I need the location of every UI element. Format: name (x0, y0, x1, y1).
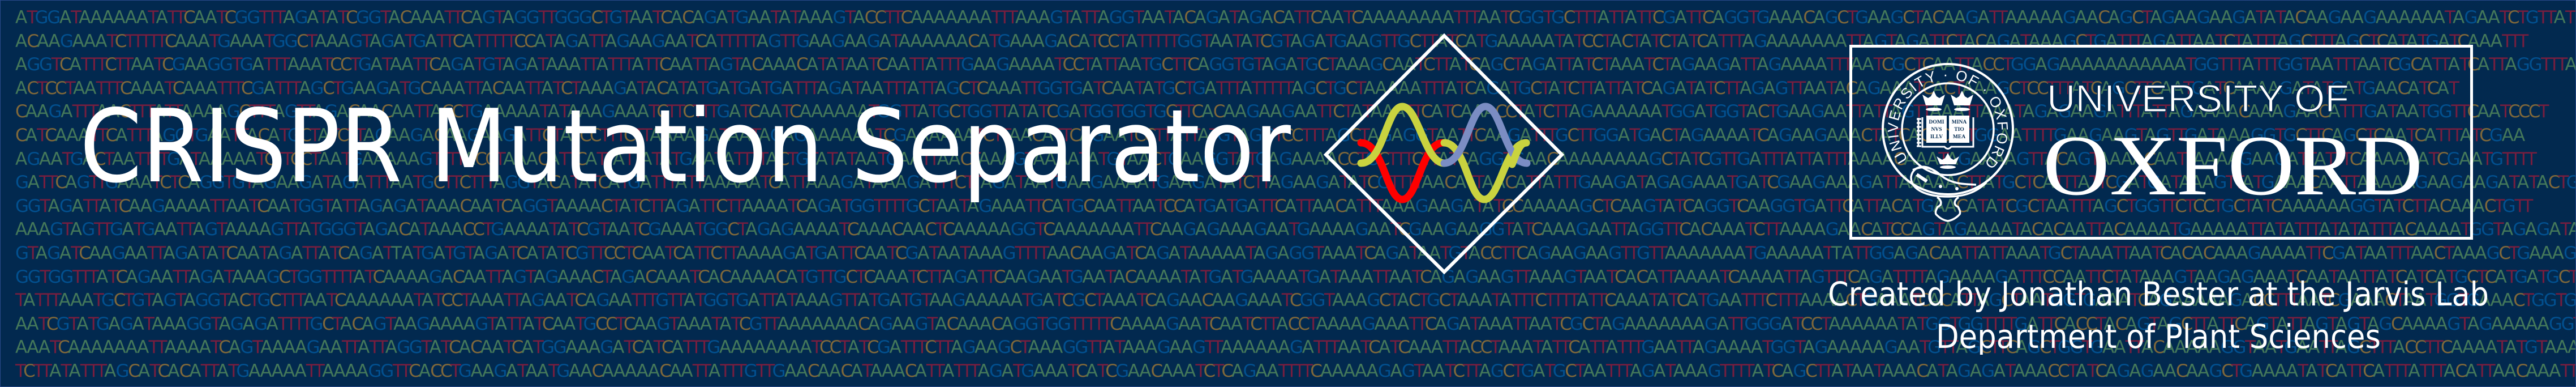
background: DNA sequence letters: ACTCCTAATTTCAAATCAAATTTCGATTTAGCTGAAGATGCAAATTACAATTATCTAAAGATACATATGATGATGATTTAGATAATTTATTAGCTCAAATTGGTGATCAATATGCTGATTTATTTTTAGCTGCTAAAAATTTATCAGATGCTATCTTATTATCAGATATCTTAGAGTTAATACAGAAATCACTAAAGCTCCTTTATCAGCTTCAATGATCAAAAGATATGATGAACATCAT (15, 78, 2457, 99)
background: DNA sequence letters: GATTCAGTTGAAATCTCAGGTGTAGAAGATAGATTTAATGCTTCTTTAGGTACATATCATGATTTATTAAAAATCATTAAAGATAAAGATTTCTTAGATAATGAAGAAAATGAAGATATCTTAGAAGATATCGTTTTAACATTAACATTATTTGAAGATAGAGAAATGATCGAAGAAAGATTAAAAACTTATGCTCATTTATTCGATGATAAAGTTATGAAACAATTAAAAAGAAGAAGATATACTGGTTGG (15, 172, 2576, 193)
icon: Oxford seal: NVS (1931, 127, 1942, 133)
credit line 1: Created by Jonathan Bester at the Jarvis Lab (1828, 275, 2489, 313)
background: DNA sequence letters: AATCGTATGAGATAAAGGTAGAGATTTTGCTACAGTAAGAAAAGTATTATCAATGCCTCAAGTAAATATCGTTAAAAAAACAGAAGTACAAACAGGTGGTTTTTCAAAAGAATCAATCTTACCTAAAAGAAATTCAGATAAATTAATCGCTAGAAAAAAAGATTGGGATCCTAAAAAATATGGTGGTTTTGATTCACCTACAGTAGCTTATTCAGTATTAGTAGTAGCAAAAGTAGAAAAAGGT (15, 314, 2576, 334)
background: DNA sequence letters: AGAATGACTAATTTTGATAAAAATCTTCCTAATGAAAAAGTTTTACCTAAACATTCATTATTATATGAATATTTTACTGTATATAATGAATTAACTAAAGTAAAATATGTAACTGAAGGTATGAGAAAACCTGCTTTCTTATCAGGTGAACAAAAAAAAGCTATCGTTGATTTATTATTTAAAACAAATAGAAAAGTTACAGTAAAACAATTAAAAGAAGATTATTTCAAAAAATCGAATGTTTT (15, 149, 2534, 169)
background: DNA sequence letters: GGTGGTTTATCAGAATTAGATAAAGCTGGTTTTATCAAAAGACAATTAGTAGAAACTAGACAAATCACAAAACATGTTGCTCAAATCTTAGATTCAAGAATGAATACAAAATATGATGAAAATGATAAATTAATCAGAGAAGTTAAAGTAATCACATTAAAATCAAAATTAGTTTCAGATTTTAGAAAAGATTTCCAATTCTATAAAGTAAGAGAAATCAATAATTATCATCATGCTCATGATGCT (15, 267, 2576, 287)
Oxford wordmark: OXFORD (2043, 118, 2423, 213)
background: DNA sequence letters: GGTAGATTATCAAGAAAATTAATCAATGGTATTAGAGATAAACAATCAGGTAAAACTATCTTAGATTCTTAAAATCAGATGGTTTTGCTAATAGAAATTCATGCAATTAATCCATGATGATTCATTAACATTTAAAGAAGATATCCAAAAAGCTCAAGTATCAGGTCAAGGTGATTCATTACATGAACATATCGCTAATTTAGCTGGTTCTCCTGCTATCAAAAAAGGTATCTTACAAACTGTT (15, 196, 2531, 216)
credit line 2: Department of Plant Sciences (1936, 317, 2381, 356)
University of wordmark: UNIVERSITY OF (2047, 77, 2349, 120)
background: DNA sequence letters: GTAGATCAAGAATTAGATATCAATAGATTATCAGATTATGATGTAGATCATATCGTTCCTCAATCATTCTTAAAAGATGATTCAATCGATAATAAAGTTTTAACAAGATCAGATAAAAATAGAGGTAAATCAGATAATGTACCTTCAGAAGAAGTTGTTAAAAAAATGAAAAATTATTGGAGACAATTATTAAATGCTAAATTAATCACACAAAGAAAATTCGATAATTTAACTAAAGCTGAAAGA (15, 243, 2576, 263)
background: DNA sequence letters: CATCAAATTCATTTAGGTGAATTACATGCTATCTTAGAAGACAAGAAGATTCTATCCTTTCTTAAAAGATAATAGAGAAAAAATCGAAAAAATCTTAACATTCAGAATCCTTATTATGTAGGTCCTTTAGCTAGAGGTAATTCAAGATTTGCTTGGATGACTAGAAAATCAGAAGAAACTATCACTCCTTGGAATTTTGAAGAAGTAGTTGATAAAGGTGCTTCAGCTCAATCATTTATCGAA (15, 125, 2525, 146)
background: DNA sequence letters: ACAAGAAATCTTTTTCAAATGAAATGGCTAAAGTAGATGATTCATTTTTCCATAGATTAGAAGAATCATTTTTAGTTGAAGAAGATAAAAAACATGAAAGACATCCTATTTTTGGTAATATCGTAGATGAAGTTGCTTATCATGAAAAATATCCTACTATCTATCATTTAGAAAAAAATTAGTAGATTCTACAGATAAAGCTGATTTAGATTAATCTATTTAGCTTTAGCTCATATGATCAAATTT (15, 31, 2526, 52)
icon: Oxford seal: TIO (1954, 127, 1964, 133)
icon: Oxford seal: UNIVERSITY · OF · OXFORD (1888, 71, 2008, 168)
icon: Oxford seal: MINA (1952, 120, 1967, 125)
background: DNA sequence letters: AAATCAAAAAAATTAAAATCAGTAAAAGAATTATTAGGTATCACAATCATGGAAAGATCATCATTTGAAAAAAAATCCTATCGATTTCTTAGAAGCTAAAGGTTATAAAGAAGTTAAAAAAGATTTAATCATCAAATTACCTAAATATTCATTATTTGAATTAGAAAATGGTAGAAAAAGAATGTTAGCTTCAGCTGGTGAATTACAAAAAGGTAATGAATTAGCTTTACCTTCAAAATATGTAAATT (15, 337, 2576, 358)
icon: Oxford seal: ILLV (1930, 134, 1943, 140)
background: DNA sequence letters: ATGGATAAAAAATATTCAATCGGTTTAGATATCGGTACAAATTCAGTAGGTTGGGCTGTAATCACAGATGAATATAAAGTACCTTCAAAAAAATTTAAAGTATTAGGTAATACAGATAGACATTCAATCAAAAAAAATTTAATCGGTGCTTTATTATTCGATTCAGGTGAAACAGCTGAAGCTACAAGATTAAAAAGAACAGCTAGAAGAAGATATACAAGAAGAAAAAATAGAATCTGTTATTT (15, 7, 2576, 28)
icon: Oxford seal (1882, 63, 2014, 222)
background: DNA sequence letters: TATTTAAATGCTGTAGTAGGTACTGCTTTAATCAAAAAATATCCTAAATTAGAATCAGAATTTGTTATGGTGATTATAAAGTTATGATGTAAGAAAAATGATCGCTAAATCAGAACAAGAAATCGGTAAAGCTACTGCTAAATATTTCTTTTATTCAAATATCATGAATTTCTTTAAAACTGAAATCACATTAGCTAATGGTGAAATCAGAAAAAGACCTTTAATCGAAACTAATGGTGAAACTGGTG (15, 290, 2576, 311)
title: CRISPR Mutation Separator (80, 88, 1291, 205)
icon: Oxford seal: DOMI (1929, 120, 1944, 125)
icon: Oxford seal: MEA (1953, 134, 1965, 140)
background: DNA sequence letters: AAAGTAGTTGATGAATTAGTAAAAGTTATGGGTAGACATAAACCTGAAAATATCGTAATCGAAATGGCTAGAGAAAATCAAACAACTCAAAAAGGTCAAAAAAATTCAAGAGAAAGAATGAAAAGAATCGAAGAAGGTATCAAAGAATTAGGTTCACAAATCTTAAAAGAACATCCAGTAGAAAATACACAATTACAAAATGAAAAATTATATTTATATATTTACAAAATGGTAGAGATATGTAT (15, 219, 2576, 240)
Oxford logo box (1849, 45, 2473, 240)
icon: diamond with sine waves (1326, 36, 1562, 272)
background: DNA sequence letters: AGGTCATTTCTTAATCGAAGGTGATTTAAATCCTGATAATTCAGATGTAGATAAATTATTTATTCAATTAGTACAAACATATAATCAATTATTTGAAGAAAATCCTATTAATGCTTCAGGTGTAGATGCTAAAGCAATCTTATCAGCTAGATTATCTAAATCTAGAAGATTAGAAAATTTAATCGCTCAATTACCTGGAGAAAAAAAAAAATGGTTTATTTGGTAATTTAATCGCATTATCATTAGGTTTA (15, 54, 2576, 75)
background: DNA sequence letters: CAAGATTTAACTTTATTAAAAGCTTTAGTTAGACAACAATTACCTGAAAAATATAAAGAAATCTTCTTTGATCAATCAAAAAATGGTTATGCTGGTTATATCGATGGTGGTGCTTCACAAGAAGAATTCTATAAATTCATCAAACCTATCTTAGAAAAAATGGATGGTACTGAAGAATTATTAGTTAAATTAAATAGAGAAGATTTATTAGAAAACAAAGAACATTTGATAATGGTTCAATCCCT (15, 101, 2547, 122)
